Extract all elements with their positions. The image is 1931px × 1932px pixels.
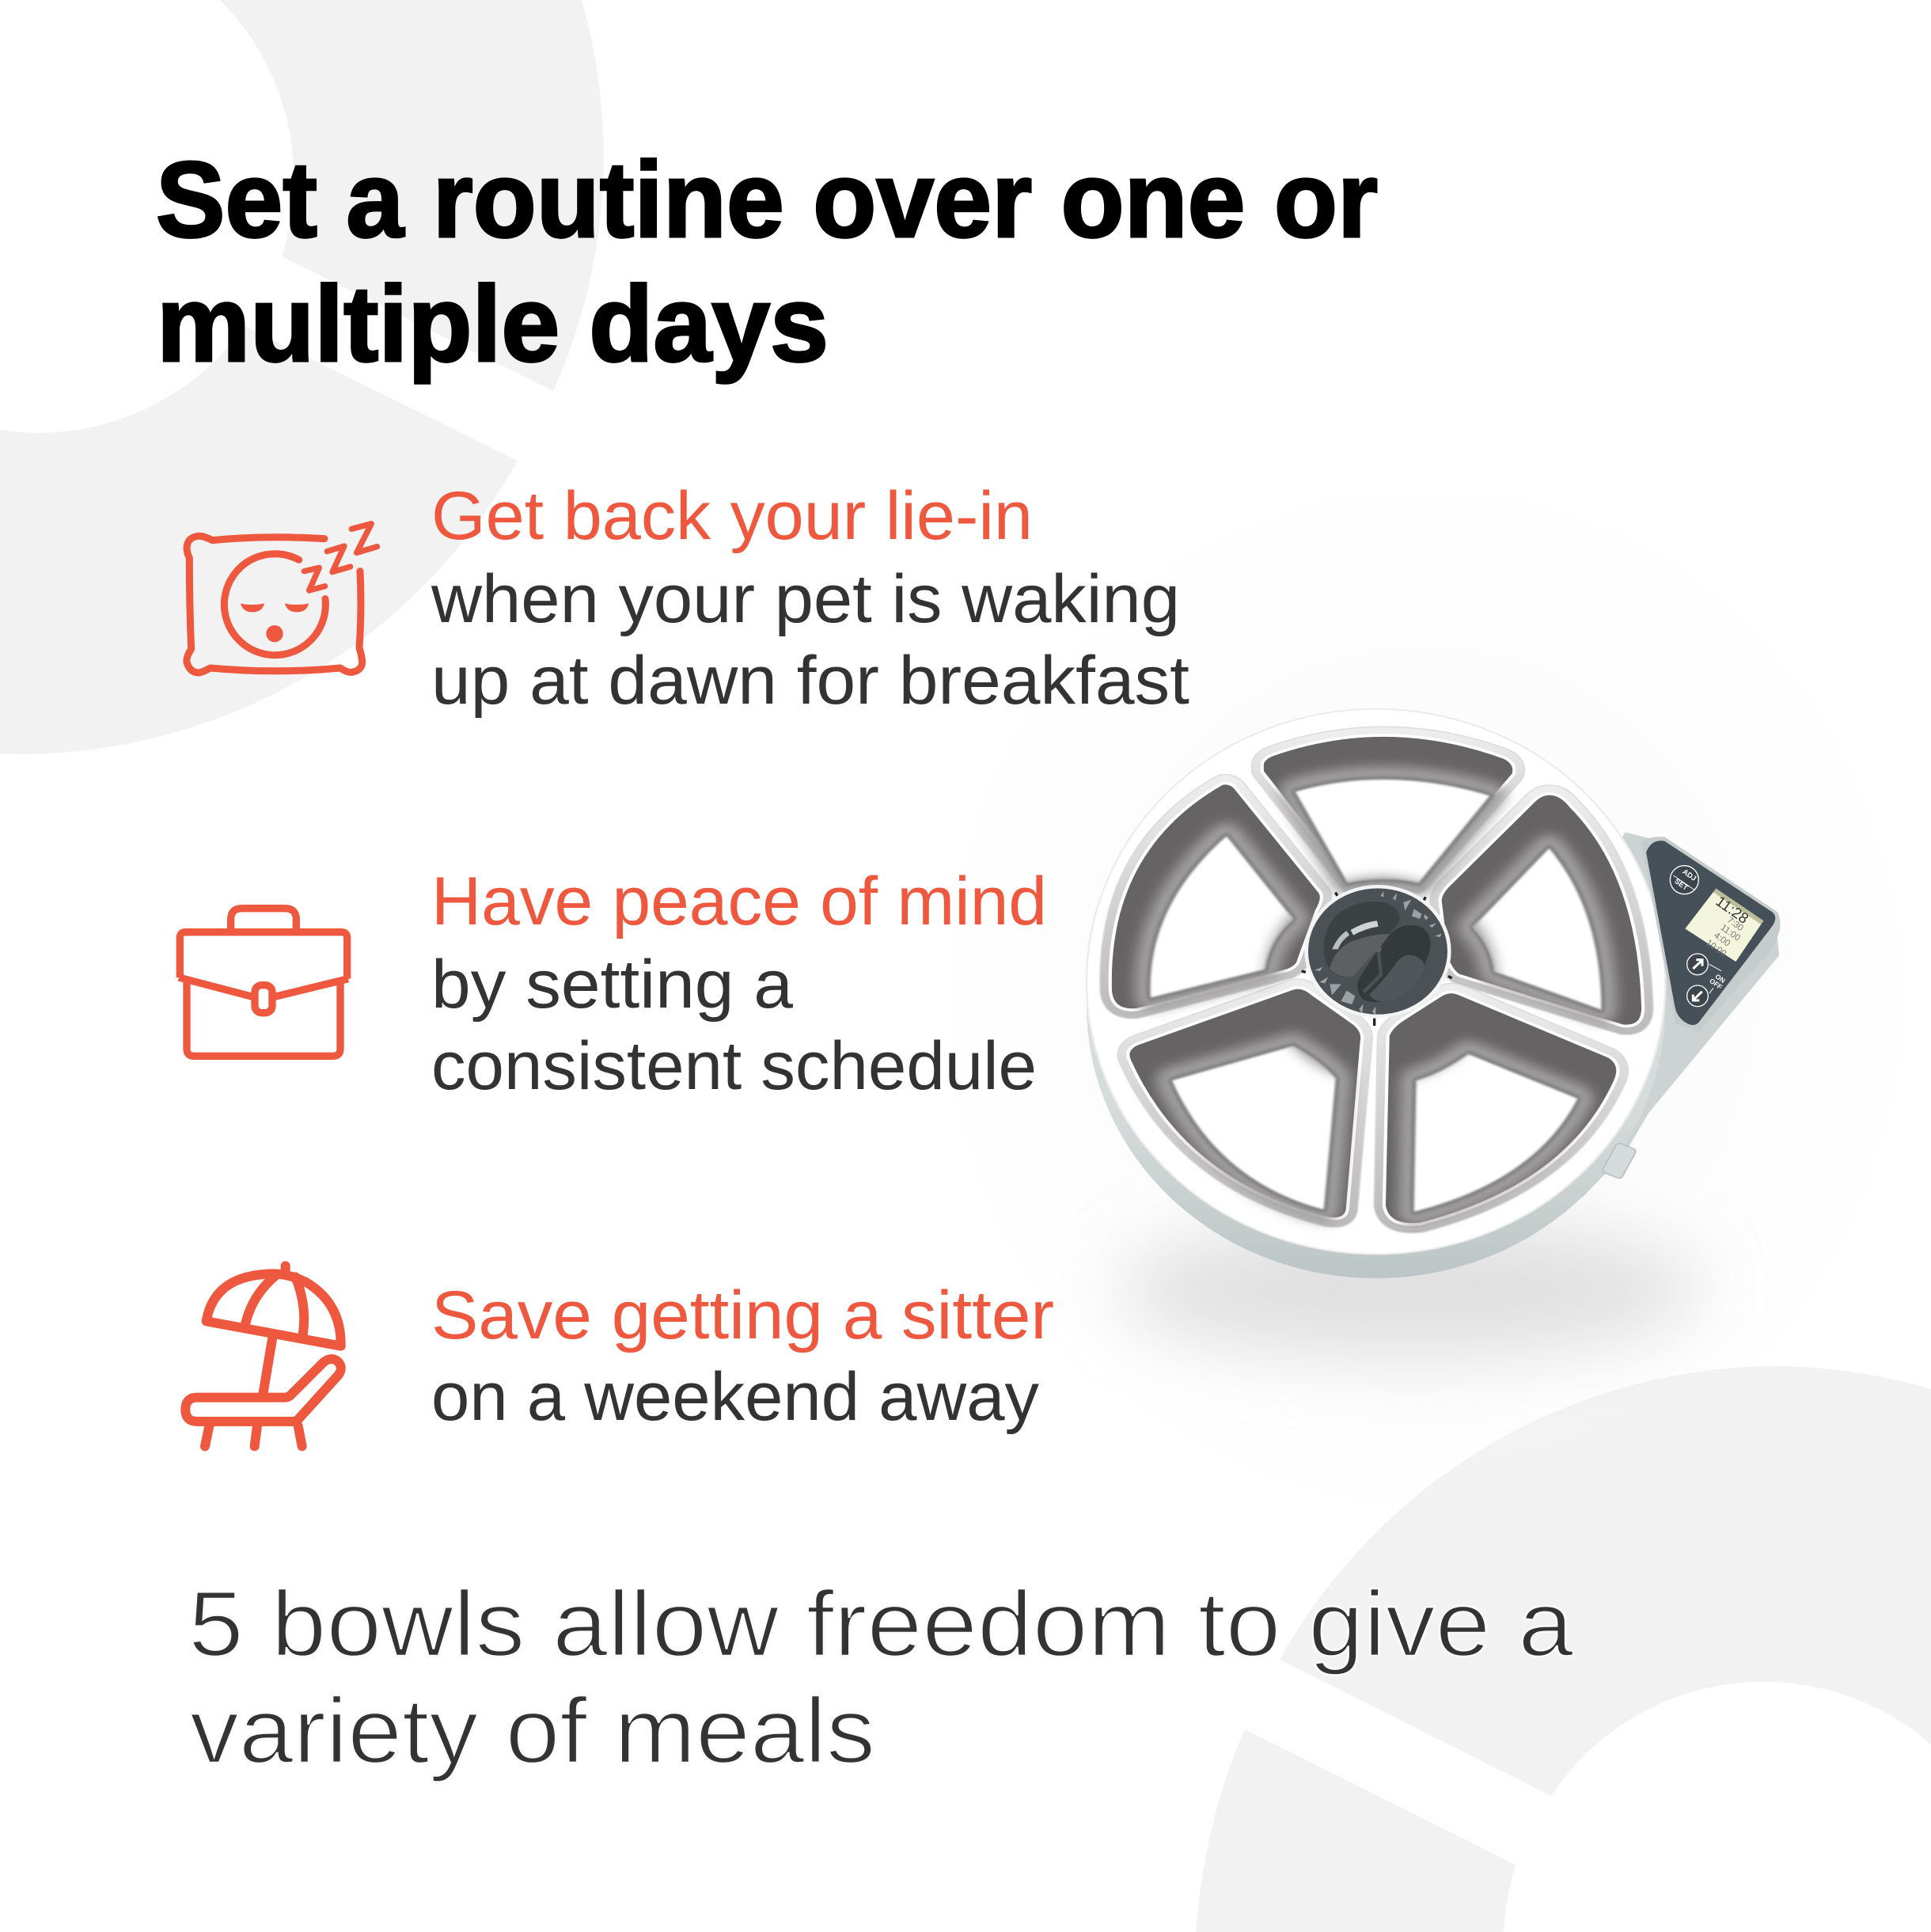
right well — [1357, 925, 1430, 1002]
on off labels: ON — [1714, 972, 1727, 985]
closing statement: variety of meals — [190, 1679, 875, 1782]
button: adjust / set — [1670, 866, 1698, 894]
text block: lie-in: up at dawn for breakfast — [431, 643, 1189, 719]
text block: sitter: Save getting a sitter — [431, 1277, 1054, 1353]
LCD screen: 11:00 — [1719, 923, 1742, 943]
icon: sun lounger and parasol — [185, 1266, 341, 1446]
icon: sleeping face on pillow — [187, 524, 377, 673]
button: down — [1687, 985, 1713, 1007]
LCD screen: 11:28 — [1713, 893, 1752, 927]
closing statement — [188, 1572, 1574, 1782]
closing statement: 5 bowls allow freedom to give a — [188, 1572, 1574, 1676]
steel bowl walls — [1110, 735, 1643, 1224]
LCD screen: 10:00 — [1704, 938, 1728, 958]
product shadow — [918, 459, 1931, 1535]
control panel — [1641, 837, 1780, 1031]
background shape: bottom-right ring — [1196, 1366, 1931, 1932]
on off labels: OFF — [1708, 977, 1724, 991]
bowl floor highlights — [1151, 780, 1601, 1212]
heading: Set a routine over one or — [156, 139, 1378, 260]
central hub — [1302, 885, 1452, 1026]
on off labels — [1708, 972, 1727, 991]
text block: lie-in: Get back your lie-in — [431, 478, 1033, 554]
dark panel face — [1646, 841, 1775, 1025]
LCD screen: 4:00 — [1712, 931, 1732, 948]
text block: peace of mind — [431, 864, 1047, 1104]
LCD screen — [1685, 889, 1763, 962]
steel wall light band — [1151, 780, 1601, 1212]
text block: sitter: on a weekend away — [431, 1359, 1039, 1435]
feeder white lid — [1087, 709, 1665, 1254]
left well — [1324, 901, 1400, 977]
heading — [156, 139, 1378, 384]
hub markings — [1315, 891, 1442, 1015]
panel housing edge — [1641, 837, 1780, 1031]
icon: briefcase — [179, 909, 348, 1056]
button: up — [1687, 954, 1721, 975]
bowl floor edge shading — [1151, 780, 1601, 1212]
text block: lie-in — [431, 478, 1189, 719]
heading: multiple days — [157, 264, 829, 384]
text block: peace of mind: Have peace of mind — [431, 864, 1047, 939]
text block: lie-in: when your pet is waking — [431, 561, 1180, 637]
background shape: top-left ring — [0, 0, 604, 754]
button: adjust / set: SET — [1673, 877, 1690, 892]
product: five bowl pet feeder — [1087, 709, 1779, 1278]
hub shadow on bowl floors — [1265, 876, 1497, 1083]
bowl rims — [1110, 735, 1643, 1224]
feeder base housing — [1087, 733, 1779, 1278]
text block: peace of mind: consistent schedule — [431, 1028, 1037, 1104]
button: adjust / set: ADJ — [1681, 867, 1698, 882]
LCD screen: 7:30 — [1725, 916, 1745, 933]
text block: sitter — [431, 1277, 1054, 1435]
text block: peace of mind: by setting a — [431, 947, 793, 1023]
